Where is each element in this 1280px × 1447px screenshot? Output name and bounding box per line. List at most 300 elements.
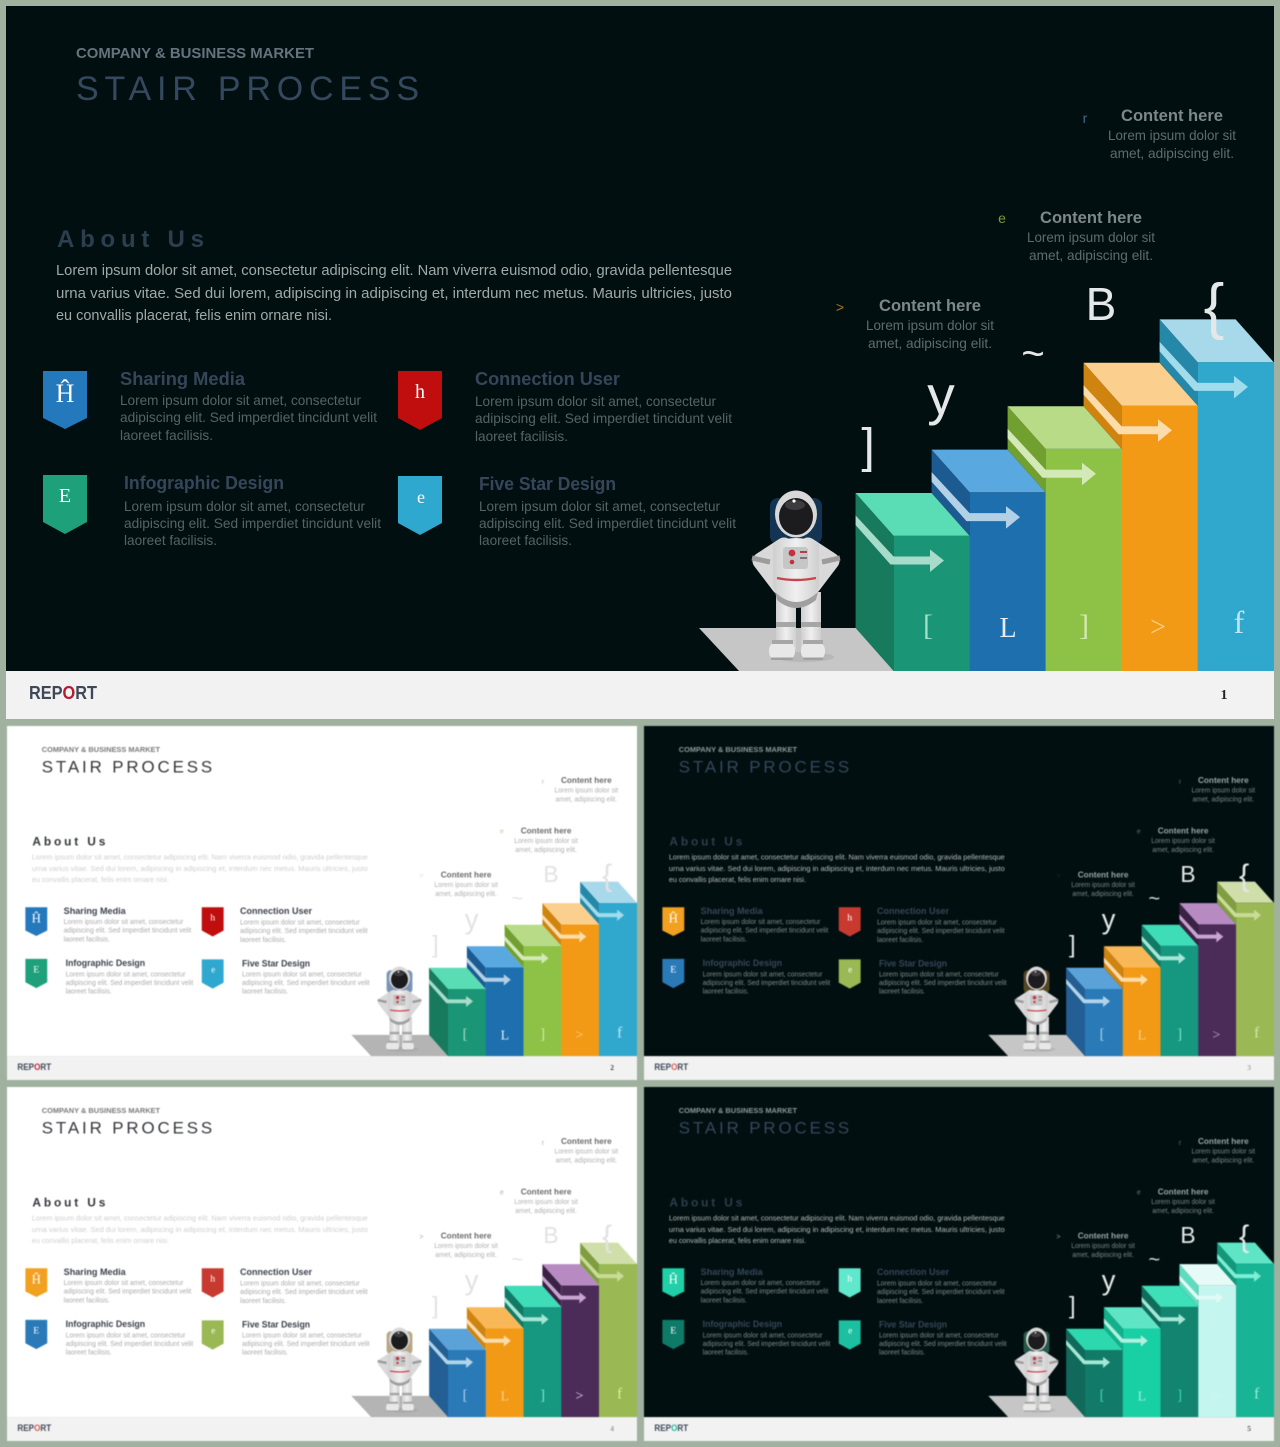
feature: connection user (839, 906, 1005, 944)
callout: content low: > (1056, 873, 1060, 880)
step front icons: > (1150, 612, 1166, 643)
footer: REPORT (654, 1423, 689, 1433)
icon: badge (662, 959, 684, 988)
callout: content low: Content here (1078, 1230, 1129, 1240)
feature: infographic design (662, 1319, 830, 1357)
footer (644, 1056, 1274, 1080)
callout: content middle (500, 1187, 578, 1215)
callout: content middle: Lorem ipsum dolor sit (514, 838, 578, 845)
subtitle: COMPANY & BUSINESS MARKET (42, 1106, 160, 1115)
icon: astronaut (378, 1328, 421, 1413)
feature: sharing media (662, 906, 828, 943)
step top icons (432, 857, 612, 958)
callout: content low: > (419, 1234, 423, 1241)
callout: content low: amet, adipiscing elit. (435, 891, 497, 898)
step 1 (856, 493, 970, 671)
icon: astronaut (1015, 967, 1058, 1052)
callout: content top (1083, 106, 1236, 161)
step top icons: ~ (1021, 332, 1045, 376)
icon: badge (839, 959, 861, 989)
callout: content top (542, 1136, 618, 1164)
step top icons: ~ (511, 1249, 523, 1271)
panel: slide 5 dark teal (643, 1086, 1275, 1442)
feature: five star design (398, 473, 736, 548)
text block: about paragraph (32, 1214, 368, 1245)
feature: connection user: Connection User (475, 368, 620, 389)
chart: staircase (856, 319, 1274, 671)
icon: badge: E (670, 964, 676, 975)
platform (351, 1035, 448, 1056)
feature: infographic design: laoreet facilisis. (703, 1350, 749, 1357)
step top icons (1069, 1218, 1249, 1319)
feature: five star design: Five Star Design (479, 473, 616, 494)
step top icons: y (465, 904, 479, 935)
step top icons: B (543, 861, 559, 887)
text block: about paragraph (32, 853, 368, 884)
feature: infographic design: Infographic Design (66, 1319, 146, 1329)
callout: content top: amet, adipiscing elit. (1110, 145, 1234, 161)
text block: about paragraph: urna varius vitae. Sed dui lorem, adipiscing in adipiscing et, interdum nec metus. Mauris ultricies, justo (669, 1225, 1005, 1234)
callout: content low: Lorem ipsum dolor sit (434, 1243, 498, 1250)
footer: 1 (1220, 688, 1228, 703)
step front icons: L (501, 1028, 509, 1043)
feature: infographic design: Lorem ipsum dolor sit amet, consectetur (66, 972, 186, 979)
callout: content top: r (1083, 110, 1088, 126)
icon: badge: h (210, 913, 215, 924)
step front icons: ] (540, 1387, 545, 1403)
step 3 (505, 925, 561, 1056)
callout: content top: Content here (1121, 106, 1223, 125)
feature: sharing media: laoreet facilisis. (64, 936, 110, 943)
title: STAIR PROCESS (679, 758, 849, 777)
slide background (6, 6, 1274, 671)
heading: about us: About Us (57, 226, 204, 253)
feature: five star design: laoreet facilisis. (879, 989, 925, 996)
callout: content low: > (1056, 1234, 1060, 1241)
footer: 3 (1247, 1063, 1251, 1072)
icon: badge: Ĥ (669, 911, 678, 926)
icon: badge (43, 371, 87, 429)
step front icons: L (999, 613, 1017, 644)
step front icons: > (575, 1389, 583, 1404)
heading: about us: About Us (669, 1196, 743, 1210)
feature: sharing media: Lorem ipsum dolor sit amet, consectetur (120, 392, 361, 408)
callout: content low: > (836, 299, 844, 315)
feature: sharing media (25, 906, 191, 943)
icon: badge: e (211, 965, 215, 975)
step 2 (467, 946, 524, 1056)
text block: about paragraph: eu convallis placerat, felis enim ornare nisi. (32, 1236, 169, 1245)
step top icons: y (1102, 1265, 1116, 1296)
step front icons: f (617, 1024, 623, 1041)
callout: content middle: Lorem ipsum dolor sit (1151, 838, 1215, 845)
feature: connection user: Lorem ipsum dolor sit amet, consectetur (877, 1281, 997, 1288)
step front icons: ] (1177, 1026, 1182, 1042)
callout: content middle: e (1137, 1190, 1141, 1197)
icon: badge: Ĥ (56, 379, 75, 408)
feature: five star design: Five Star Design (242, 958, 310, 968)
subtitle: COMPANY & BUSINESS MARKET (679, 1106, 797, 1115)
callout: content middle: e (998, 210, 1006, 226)
feature: sharing media: adipiscing elit. Sed imperdiet tincidunt velit (120, 409, 377, 425)
step 5 (580, 882, 637, 1056)
feature: connection user: adipiscing elit. Sed imperdiet tincidunt velit (475, 410, 732, 426)
callout: content top: amet, adipiscing elit. (1193, 796, 1254, 803)
feature: connection user: laoreet facilisis. (475, 428, 568, 444)
callout: content top: r (1179, 1140, 1182, 1147)
slide background (644, 1087, 1274, 1417)
feature: infographic design: adipiscing elit. Sed imperdiet tincidunt velit (124, 515, 381, 531)
feature: infographic design: Lorem ipsum dolor sit amet, consectetur (703, 972, 823, 979)
feature: infographic design: laoreet facilisis. (124, 532, 217, 548)
callout: content top: Content here (561, 775, 612, 785)
feature: five star design: Lorem ipsum dolor sit amet, consectetur (242, 1333, 362, 1340)
icon: badge: E (33, 1325, 39, 1336)
icon: astronaut (378, 967, 421, 1052)
icon: badge (662, 1268, 684, 1297)
feature: five star design (839, 958, 1007, 996)
callout: content middle: Content here (1158, 1187, 1209, 1197)
feature: five star design: Lorem ipsum dolor sit amet, consectetur (479, 498, 720, 514)
feature: connection user (839, 1267, 1005, 1305)
icon: badge: h (210, 1274, 215, 1285)
step 4 (542, 1264, 599, 1417)
feature: connection user: laoreet facilisis. (240, 937, 286, 944)
icon: badge (43, 475, 87, 534)
step front icons: ] (1079, 609, 1089, 642)
step front icons: L (1138, 1028, 1146, 1043)
feature: connection user: Lorem ipsum dolor sit amet, consectetur (877, 920, 997, 927)
feature: sharing media: Sharing Media (701, 906, 764, 916)
callout: content middle: Lorem ipsum dolor sit (1151, 1199, 1215, 1206)
footer: 4 (610, 1424, 614, 1433)
step top icons (432, 1218, 612, 1319)
feature: infographic design (662, 958, 830, 996)
step front icons: ] (540, 1026, 545, 1042)
feature: five star design: Lorem ipsum dolor sit amet, consectetur (879, 972, 999, 979)
callout: content middle: amet, adipiscing elit. (1029, 247, 1153, 263)
title: STAIR PROCESS (42, 758, 212, 777)
step 4 (542, 903, 599, 1056)
feature: connection user: Lorem ipsum dolor sit amet, consectetur (240, 1281, 360, 1288)
footer: REPORT (654, 1062, 689, 1072)
step 1 (429, 1329, 486, 1417)
step 2 (467, 1307, 524, 1417)
feature: connection user: laoreet facilisis. (877, 1298, 923, 1305)
callout: content middle (998, 208, 1155, 263)
step front icons: L (501, 1389, 509, 1404)
step 3 (1142, 925, 1198, 1056)
feature: connection user: Connection User (240, 906, 312, 916)
chart: staircase (429, 1243, 637, 1417)
title: STAIR PROCESS (42, 1119, 212, 1138)
icon: badge: e (211, 1326, 215, 1336)
callout: content top: amet, adipiscing elit. (1193, 1157, 1254, 1164)
icon: badge: e (848, 965, 852, 975)
feature: five star design: adipiscing elit. Sed imperdiet tincidunt velit (242, 1341, 370, 1348)
text block: about paragraph: Lorem ipsum dolor sit amet, consectetur adipiscing elit. Nam viverra euismod odio, gravida pellentesque (669, 853, 1005, 862)
callout: content middle: e (500, 1190, 504, 1197)
feature: sharing media: Lorem ipsum dolor sit amet, consectetur (701, 1280, 821, 1287)
step 1 (429, 968, 486, 1056)
callout: content low: Lorem ipsum dolor sit (434, 882, 498, 889)
feature: sharing media: Sharing Media (64, 906, 127, 916)
step top icons: B (543, 1222, 559, 1248)
text block: about paragraph: Lorem ipsum dolor sit amet, consectetur adipiscing elit. Nam viverra euismod odio, gravida pellentesque (32, 1214, 368, 1223)
feature: sharing media: adipiscing elit. Sed imperdiet tincidunt velit (64, 1289, 191, 1296)
step front icons (923, 604, 1245, 644)
step front icons: [ (463, 1026, 468, 1042)
callout: content middle (500, 826, 578, 854)
step 4 (1084, 363, 1198, 671)
feature: five star design (839, 1319, 1007, 1357)
feature: five star design: Five Star Design (879, 958, 947, 968)
callout: content low: Lorem ipsum dolor sit (1071, 882, 1135, 889)
step front icons: f (1234, 604, 1245, 640)
feature: infographic design: Infographic Design (66, 958, 146, 968)
step top icons: { (602, 857, 612, 892)
feature: infographic design: Infographic Design (703, 958, 783, 968)
footer: REPORT (17, 1062, 52, 1072)
icon: badge (398, 371, 442, 430)
title: STAIR PROCESS (76, 70, 419, 108)
icon: badge (25, 1268, 47, 1297)
feature: five star design: laoreet facilisis. (479, 532, 572, 548)
chart: staircase (429, 882, 637, 1056)
step front icons: f (1254, 1385, 1260, 1402)
feature: five star design: Lorem ipsum dolor sit amet, consectetur (879, 1333, 999, 1340)
step 3 (1008, 406, 1122, 671)
panel: slide 1 dark large (6, 6, 1274, 719)
callout: content low: Content here (441, 1230, 492, 1240)
callout: content low (1056, 1230, 1135, 1259)
footer (7, 1417, 637, 1441)
text block: about paragraph: urna varius vitae. Sed dui lorem, adipiscing in adipiscing et, interdum nec metus. Mauris ultricies, justo (32, 1225, 368, 1234)
chart: staircase (1066, 882, 1274, 1056)
feature: connection user: Connection User (240, 1267, 312, 1277)
feature: five star design: adipiscing elit. Sed imperdiet tincidunt velit (242, 980, 370, 987)
callout: content top: Content here (561, 1136, 612, 1146)
feature: infographic design: Lorem ipsum dolor sit amet, consectetur (124, 498, 365, 514)
step top icons: { (602, 1218, 612, 1253)
icon: badge (839, 1320, 861, 1350)
callout: content top: r (542, 779, 545, 786)
icon: astronaut (752, 490, 840, 662)
feature: five star design: Lorem ipsum dolor sit amet, consectetur (242, 972, 362, 979)
step 5 (1160, 319, 1274, 671)
feature: sharing media (662, 1267, 828, 1304)
callout: content top (1179, 775, 1255, 803)
feature: infographic design: adipiscing elit. Sed imperdiet tincidunt velit (703, 1341, 830, 1348)
platform (351, 1396, 448, 1417)
feature: connection user: Connection User (877, 906, 949, 916)
step front icons: f (1254, 1024, 1260, 1041)
feature: infographic design: Infographic Design (124, 472, 284, 493)
step front icons: [ (463, 1387, 468, 1403)
step front icons: > (1212, 1389, 1220, 1404)
feature: sharing media: Lorem ipsum dolor sit amet, consectetur (64, 919, 184, 926)
callout: content top: r (1179, 779, 1182, 786)
step top icons: ] (432, 1292, 439, 1319)
callout: content low: Content here (879, 296, 981, 315)
footer: REPORT (29, 683, 97, 703)
callout: content top: Content here (1198, 775, 1249, 785)
step top icons: { (1204, 272, 1224, 341)
callout: content top: r (542, 1140, 545, 1147)
icon: badge (202, 1268, 224, 1298)
step top icons: ] (1069, 931, 1076, 958)
footer: 2 (610, 1063, 614, 1072)
step 3 (505, 1286, 561, 1417)
step top icons: ~ (1148, 1249, 1160, 1271)
feature: sharing media: adipiscing elit. Sed imperdiet tincidunt velit (701, 928, 828, 935)
callout: content middle: Content here (521, 1187, 572, 1197)
footer (7, 1056, 637, 1080)
step top icons: ] (861, 420, 875, 473)
feature: infographic design (25, 1319, 193, 1357)
step front icons (463, 1385, 623, 1404)
icon: badge: Ĥ (32, 1272, 41, 1287)
callout: content low: Content here (441, 869, 492, 879)
icon: badge: Ĥ (669, 1272, 678, 1287)
step top icons (1069, 857, 1249, 958)
heading: about us: About Us (669, 835, 743, 849)
feature: five star design: laoreet facilisis. (242, 989, 288, 996)
feature: five star design: adipiscing elit. Sed imperdiet tincidunt velit (479, 515, 736, 531)
step top icons: { (1239, 1218, 1249, 1253)
footer (6, 671, 1274, 719)
step top icons (861, 272, 1224, 473)
callout: content middle: Content here (1040, 208, 1142, 227)
feature: five star design: adipiscing elit. Sed imperdiet tincidunt velit (879, 1341, 1007, 1348)
slide background (7, 1087, 637, 1417)
step front icons: ] (1177, 1387, 1182, 1403)
icon: badge: e (848, 1326, 852, 1336)
feature: connection user: adipiscing elit. Sed imperdiet tincidunt velit (240, 1289, 368, 1296)
callout: content middle: Lorem ipsum dolor sit (1027, 229, 1155, 245)
feature: five star design: Five Star Design (879, 1319, 947, 1329)
feature: sharing media: laoreet facilisis. (64, 1297, 110, 1304)
feature: sharing media: laoreet facilisis. (120, 427, 213, 443)
icon: badge: E (33, 964, 39, 975)
callout: content top: amet, adipiscing elit. (556, 796, 617, 803)
icon: badge (202, 907, 224, 937)
step 4 (1179, 1264, 1236, 1417)
callout: content low (419, 869, 498, 898)
step 3 (1142, 1286, 1198, 1417)
callout: content top: Content here (1198, 1136, 1249, 1146)
step top icons: B (1086, 278, 1116, 330)
feature: infographic design: adipiscing elit. Sed imperdiet tincidunt velit (66, 980, 193, 987)
step 2 (932, 450, 1046, 671)
icon: badge (25, 959, 47, 988)
text block: about paragraph: eu convallis placerat, felis enim ornare nisi. (32, 875, 169, 884)
callout: content top (1179, 1136, 1255, 1164)
callout: content low: Lorem ipsum dolor sit (1071, 1243, 1135, 1250)
step front icons (1100, 1385, 1260, 1404)
callout: content middle (1137, 1187, 1215, 1215)
icon: badge (25, 907, 47, 936)
feature: infographic design: Lorem ipsum dolor sit amet, consectetur (66, 1333, 186, 1340)
platform (699, 628, 894, 671)
text block: about paragraph: urna varius vitae. Sed dui lorem, adipiscing in adipiscing et, interdum nec metus. Mauris ultricies, justo (669, 864, 1005, 873)
step front icons (463, 1024, 623, 1043)
callout: content low (419, 1230, 498, 1259)
step front icons: > (575, 1028, 583, 1043)
icon: badge (662, 907, 684, 936)
text block: about paragraph: Lorem ipsum dolor sit amet, consectetur adipiscing elit. Nam viverra euismod odio, gravida pellentesque (669, 1214, 1005, 1223)
step front icons: [ (923, 609, 933, 642)
title: STAIR PROCESS (679, 1119, 849, 1138)
footer: REPORT (17, 1423, 52, 1433)
text block: about paragraph: urna varius vitae. Sed dui lorem, adipiscing in adipiscing et, interdum nec metus. Mauris ultricies, justo (32, 864, 368, 873)
callout: content middle: amet, adipiscing elit. (515, 1208, 577, 1215)
step 2 (1104, 1307, 1161, 1417)
heading: about us: About Us (32, 835, 106, 849)
feature: sharing media: adipiscing elit. Sed imperdiet tincidunt velit (64, 928, 191, 935)
icon: badge: Ĥ (32, 911, 41, 926)
icon: badge: h (847, 913, 852, 924)
icon: badge (839, 907, 861, 937)
callout: content middle (1137, 826, 1215, 854)
step front icons (1100, 1024, 1260, 1043)
feature: sharing media: Lorem ipsum dolor sit amet, consectetur (701, 919, 821, 926)
panel: slide 4 light (6, 1086, 638, 1442)
subtitle: COMPANY & BUSINESS MARKET (679, 745, 797, 754)
step top icons: B (1180, 1222, 1196, 1248)
icon: badge (202, 1320, 224, 1350)
feature: infographic design: laoreet facilisis. (66, 1350, 112, 1357)
callout: content middle: amet, adipiscing elit. (1152, 847, 1214, 854)
step top icons: B (1180, 861, 1196, 887)
text block: about paragraph (669, 1214, 1005, 1245)
feature: sharing media (43, 368, 377, 443)
footer: 5 (1247, 1424, 1251, 1433)
icon: badge (202, 959, 224, 989)
panel: slide 3 dark (643, 725, 1275, 1080)
icon: badge: h (415, 381, 425, 403)
feature: connection user (202, 906, 368, 944)
callout: content top: Lorem ipsum dolor sit (1108, 127, 1236, 143)
feature: five star design: Five Star Design (242, 1319, 310, 1329)
slide background (644, 726, 1274, 1056)
callout: content middle: amet, adipiscing elit. (1152, 1208, 1214, 1215)
step front icons: f (617, 1385, 623, 1402)
icon: badge: e (417, 487, 425, 507)
feature: connection user: laoreet facilisis. (240, 1298, 286, 1305)
step 5 (1217, 882, 1274, 1056)
panel: slide 2 light (6, 726, 638, 1080)
heading: about us: About Us (32, 1196, 106, 1210)
feature: connection user: adipiscing elit. Sed imperdiet tincidunt velit (877, 1289, 1005, 1296)
callout: content low: amet, adipiscing elit. (1072, 891, 1134, 898)
callout: content top: amet, adipiscing elit. (556, 1157, 617, 1164)
callout: content middle: Lorem ipsum dolor sit (514, 1199, 578, 1206)
callout: content low: amet, adipiscing elit. (868, 335, 992, 351)
callout: content top: Lorem ipsum dolor sit (1192, 1149, 1255, 1156)
slide background (7, 726, 637, 1056)
subtitle: COMPANY & BUSINESS MARKET (42, 745, 160, 754)
feature: connection user: Lorem ipsum dolor sit amet, consectetur (475, 393, 716, 409)
step top icons: y (465, 1265, 479, 1296)
feature: connection user: Connection User (877, 1267, 949, 1277)
platform (988, 1035, 1085, 1056)
step front icons: [ (1100, 1387, 1105, 1403)
feature: connection user: Lorem ipsum dolor sit amet, consectetur (240, 920, 360, 927)
text block: about paragraph (56, 263, 732, 324)
step 2 (1104, 946, 1161, 1056)
callout: content low: amet, adipiscing elit. (1072, 1252, 1134, 1259)
